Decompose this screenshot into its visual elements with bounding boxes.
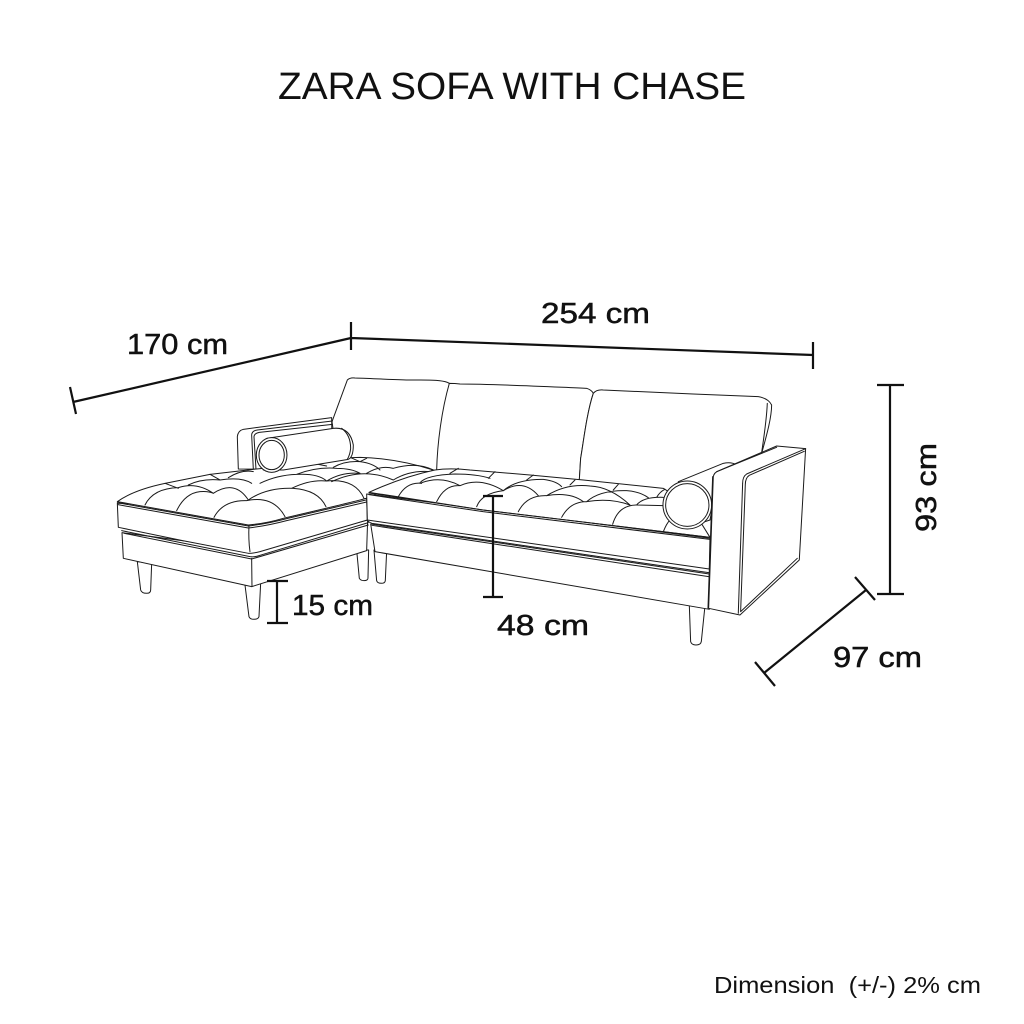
title: ZARA SOFA WITH CHASE [278,66,746,108]
dimension: height 93 cm: 93 cm [911,443,943,532]
left bolster pillow [256,428,353,472]
chaise legs [137,562,152,593]
back cushions [332,378,772,503]
main seat tufting [369,468,710,539]
seat front panel [117,498,367,553]
tolerance note: Dimension (+/-) 2% cm [714,972,981,998]
piping [367,521,709,573]
chaise base, legs and seat [117,498,387,619]
dimension: leg height 15 cm: 15 cm [292,590,373,622]
dimension: seat height 48 cm: 48 cm [497,610,589,642]
dimension: sofa length 254 cm [351,298,813,369]
dimension: depth 97 cm: 97 cm [833,642,922,674]
chaise seat tufting [117,457,433,528]
seat front panel [367,494,710,569]
right front leg [689,605,705,645]
base [371,524,709,609]
right bolster pillow [678,463,737,527]
dimension: chaise length 170 cm: 170 cm [127,329,228,361]
dimension: seat height 48 cm [483,496,589,642]
dimension: leg height 15 cm [267,581,373,623]
dimension: depth 97 cm [755,577,922,686]
base [122,520,368,587]
sofa illustration [117,378,806,645]
left armrest [237,418,332,470]
dimension: sofa length 254 cm: 254 cm [541,298,650,330]
piping [122,523,368,557]
right arm and bolster [663,446,806,615]
right armrest [709,446,806,615]
dimension: height 93 cm [877,385,943,594]
main seat section [367,494,710,645]
dimension: chaise length 170 cm [70,329,351,414]
